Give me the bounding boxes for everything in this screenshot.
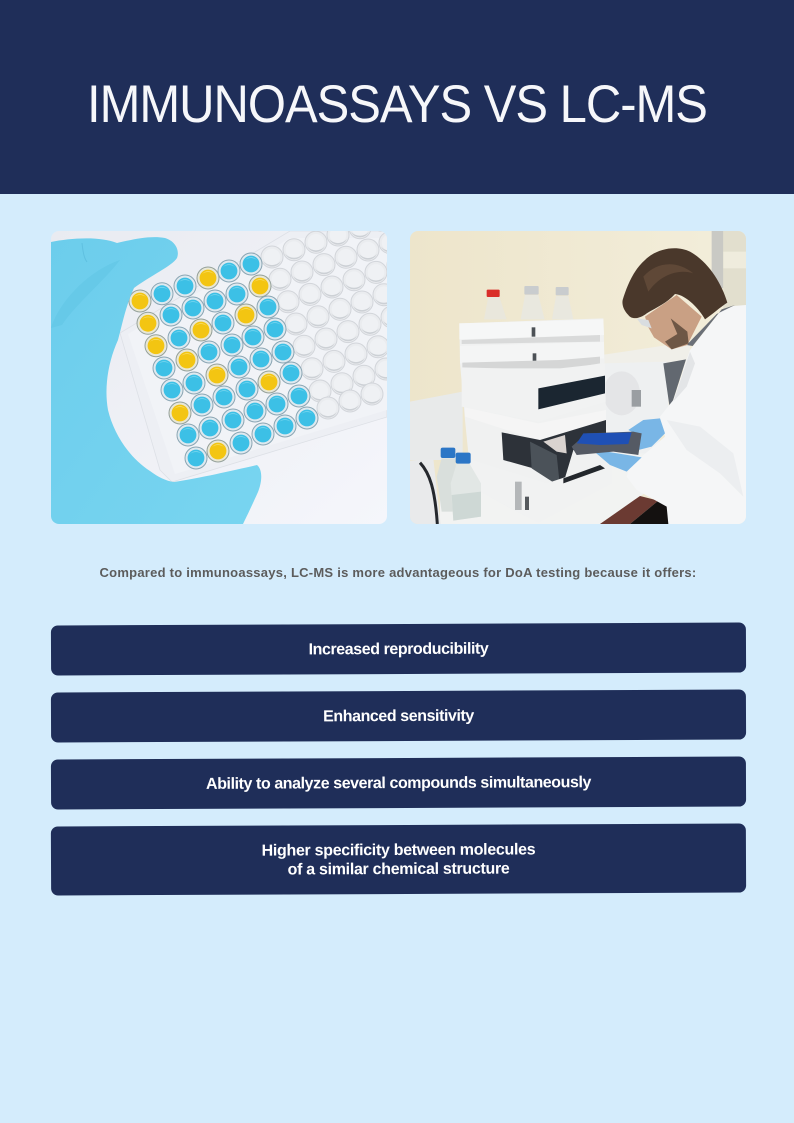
intro text: Compared to immunoassays, LC-MS is more advantageous for DoA testing because it offers:	[100, 565, 696, 580]
bar: multiple compounds	[51, 756, 746, 810]
white analyser behind	[605, 370, 668, 450]
bar: multiple compounds: Ability to analyze several compounds simultaneously	[206, 774, 591, 793]
wall	[410, 230, 747, 524]
title: IMMUNOASSAYS VS LC-MS	[87, 75, 707, 134]
neck and face	[645, 295, 702, 349]
photo: scientist loading LC-MS instrument	[410, 231, 746, 524]
photo 1 contents	[51, 231, 387, 524]
bar: sensitivity	[51, 689, 746, 742]
photo: gloved hand holding microplate	[51, 231, 387, 524]
bar: reproducibility	[51, 622, 746, 675]
header band	[0, 0, 794, 194]
bar: specificity: Higher specificity between molecules	[262, 841, 535, 859]
bar: reproducibility: Increased reproducibility	[309, 640, 488, 658]
lower wall and shelf	[410, 392, 463, 460]
gloves and tray	[572, 418, 665, 472]
clear wells	[260, 231, 387, 420]
bar: specificity: of a similar chemical structure	[288, 861, 510, 879]
scientist coat	[644, 305, 746, 524]
small white device	[410, 459, 441, 524]
bar: sensitivity: Enhanced sensitivity	[323, 707, 474, 725]
small bottles	[437, 448, 481, 521]
bar: specificity	[51, 824, 746, 896]
solvent bottles	[484, 286, 573, 319]
plate	[120, 231, 387, 482]
filled wells	[129, 253, 318, 469]
hair	[622, 248, 727, 319]
glove	[51, 237, 261, 524]
LC stack	[459, 318, 612, 523]
